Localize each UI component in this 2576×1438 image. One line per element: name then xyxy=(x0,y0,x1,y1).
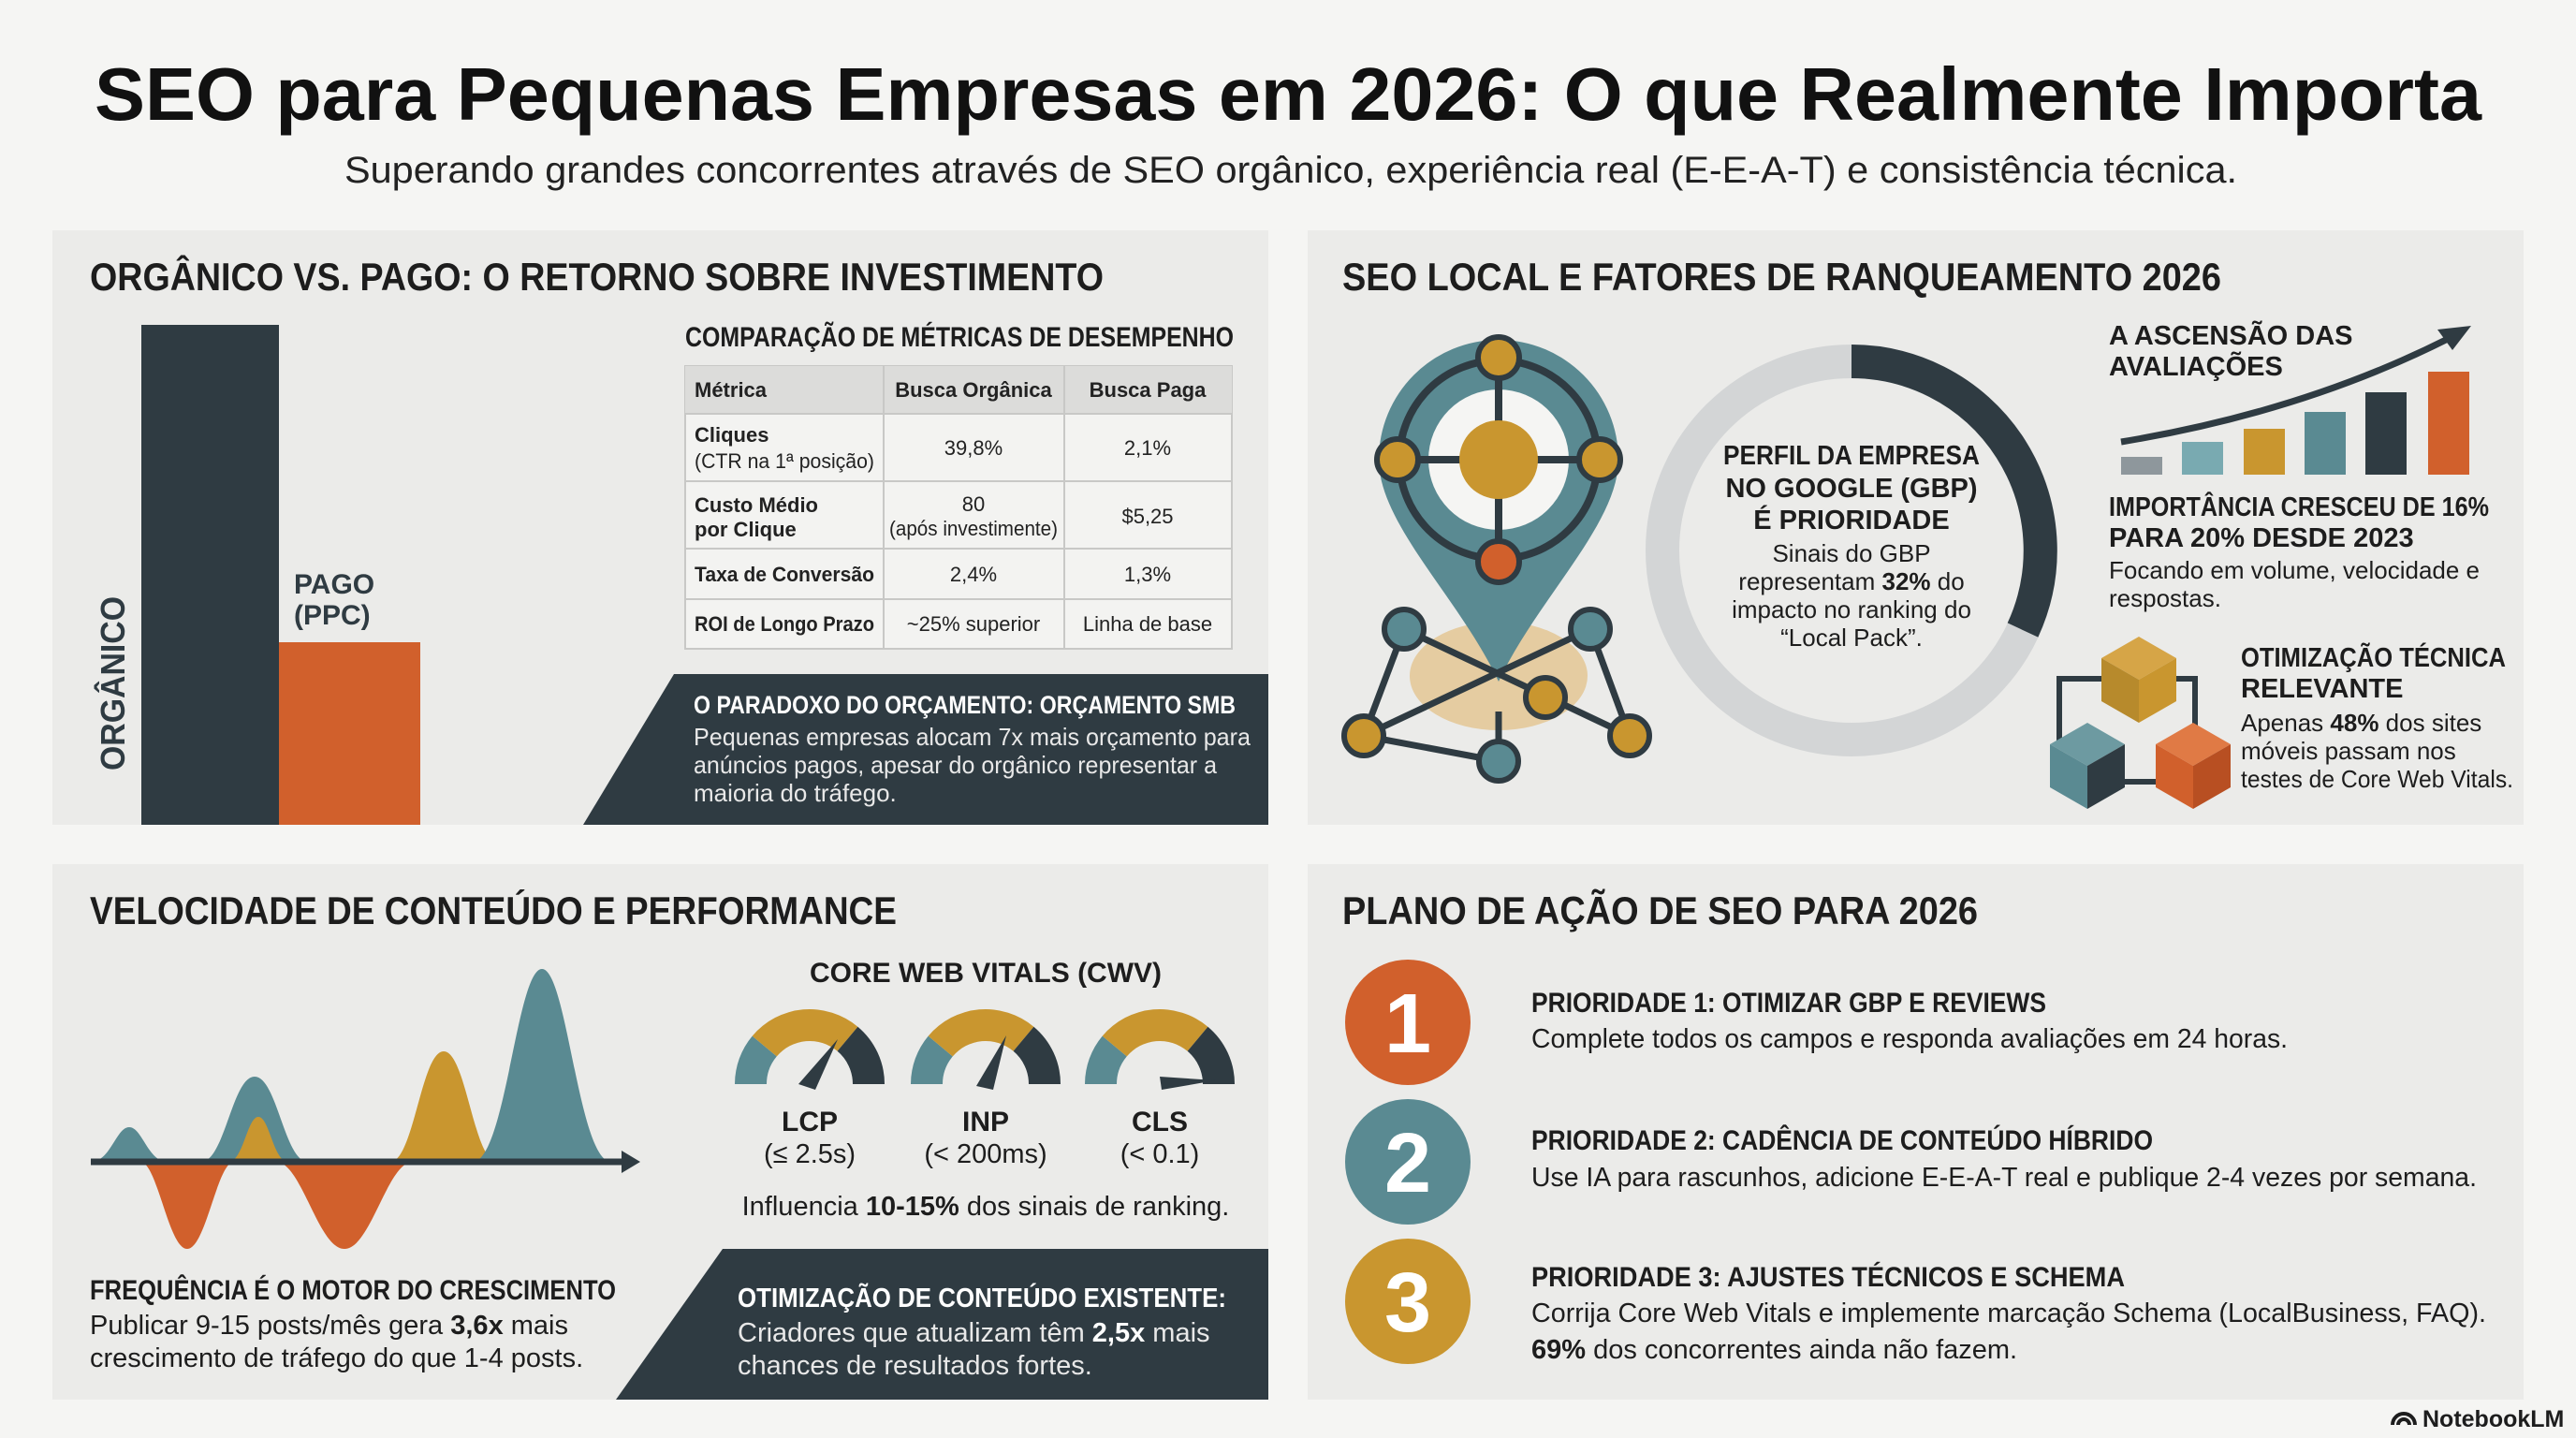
text: technical optimization: testes de Core Web Vitals. xyxy=(2241,765,2513,793)
chart: GBP donut: Sinais do GBP xyxy=(1772,539,1931,567)
table: metrics comparison: Busca Orgânica xyxy=(895,378,1053,402)
step 2: PRIORIDADE 2: CADÊNCIA DE CONTEÚDO HÍBRIDO xyxy=(1531,1124,2153,1156)
step 3 xyxy=(1345,1239,2486,1365)
table: metrics comparison: (após investimente) xyxy=(889,517,1058,540)
text: technical optimization: OTIMIZAÇÃO TÉCNICA xyxy=(2241,641,2506,673)
heading: organic vs paid: ORGÂNICO VS. PAGO: O RETORNO SOBRE INVESTIMENTO xyxy=(90,254,1104,299)
table: metrics comparison: 1,3% xyxy=(1124,563,1171,586)
subtitle: Superando grandes concorrentes através de SEO orgânico, experiência real (E-E-A-T) e consistência técnica. xyxy=(344,150,2237,191)
text: technical optimization: RELEVANTE xyxy=(2241,674,2403,704)
table: metrics comparison xyxy=(685,366,1232,649)
callout: budget paradox: Pequenas empresas alocam 7x mais orçamento para xyxy=(694,723,1251,751)
table: metrics comparison: 80 xyxy=(962,492,985,516)
chart: core web vitals gauges: INP xyxy=(962,1107,1009,1137)
chart: reviews rising bars xyxy=(2109,319,2471,475)
panel: action plan xyxy=(1308,864,2524,1400)
chart: core web vitals gauges xyxy=(735,958,1235,1222)
step 3: 69% dos concorrentes ainda não fazem. xyxy=(1531,1335,2017,1365)
callout: content optimization xyxy=(616,1249,1268,1400)
bar chart: organic vs paid: (PPC) xyxy=(294,600,371,631)
table: metrics comparison: Busca Paga xyxy=(1090,378,1207,402)
table: metrics comparison: Cliques xyxy=(695,423,768,447)
chart: core web vitals gauges: CORE WEB VITALS (CWV) xyxy=(810,958,1162,989)
chart: reviews rising bars: A ASCENSÃO DAS xyxy=(2109,319,2353,351)
table: metrics comparison: Custo Médio xyxy=(695,493,818,517)
callout: content optimization: chances de resultados fortes. xyxy=(738,1351,1092,1381)
callout: budget paradox: anúncios pagos, apesar do orgânico representar a xyxy=(694,751,1218,779)
table: metrics comparison: Métrica xyxy=(695,378,768,402)
step 1: Complete todos os campos e responda avaliações em 24 horas. xyxy=(1531,1024,2288,1054)
callout: content optimization: Criadores que atualizam têm 2,5x mais xyxy=(738,1318,1210,1348)
step 2: Use IA para rascunhos, adicione E-E-A-T real e publique 2-4 vezes por semana. xyxy=(1531,1163,2477,1193)
panel: local SEO xyxy=(1308,230,2524,825)
bar chart: organic vs paid: PAGO xyxy=(294,569,374,600)
chart: GBP donut: NO GOOGLE (GBP) xyxy=(1725,474,1978,504)
text: frequency: Publicar 9-15 posts/mês gera 3,6x mais xyxy=(90,1311,568,1341)
table: metrics comparison: Taxa de Conversão xyxy=(695,563,874,586)
panel: content velocity xyxy=(52,864,1268,1400)
table: metrics comparison: (CTR na 1ª posição) xyxy=(695,449,874,473)
callout: budget paradox: maioria do tráfego. xyxy=(694,779,897,807)
chart: reviews rising bars: AVALIAÇÕES xyxy=(2109,350,2283,382)
bar chart: organic vs paid: ORGÂNICO xyxy=(93,596,132,770)
table: metrics comparison: 2,1% xyxy=(1124,436,1171,460)
callout: content optimization: OTIMIZAÇÃO DE CONTEÚDO EXISTENTE: xyxy=(738,1282,1226,1313)
table: metrics comparison: ~25% superior xyxy=(907,612,1040,636)
text: frequency xyxy=(90,1274,616,1373)
step 1 xyxy=(1345,960,2288,1085)
chart: core web vitals gauges: (< 200ms) xyxy=(924,1139,1047,1169)
text: importance grew: IMPORTÂNCIA CRESCEU DE 16% xyxy=(2109,491,2489,522)
text: technical optimization: Apenas 48% dos sites xyxy=(2241,709,2481,737)
table: metrics comparison: por Clique xyxy=(695,518,797,541)
chart: core web vitals gauges: Influencia 10-15% dos sinais de ranking. xyxy=(742,1192,1229,1222)
chart: GBP donut: É PRIORIDADE xyxy=(1753,504,1950,536)
step 3: 3 xyxy=(1384,1256,1431,1350)
heading: content velocity: VELOCIDADE DE CONTEÚDO E PERFORMANCE xyxy=(90,888,897,932)
chart: GBP donut: impacto no ranking do xyxy=(1732,595,1971,624)
heading: action plan: PLANO DE AÇÃO DE SEO PARA 2026 xyxy=(1342,888,1978,932)
step 2 xyxy=(1345,1099,2477,1225)
icon: map pin network xyxy=(1344,337,1649,781)
chart: GBP donut xyxy=(1662,361,2041,740)
text: importance grew xyxy=(2109,491,2489,612)
text: frequency: FREQUÊNCIA É O MOTOR DO CRESCIMENTO xyxy=(90,1274,616,1306)
text: frequency: crescimento de tráfego do que 1-4 posts. xyxy=(90,1343,583,1373)
callout: budget paradox: O PARADOXO DO ORÇAMENTO: ORÇAMENTO SMB xyxy=(694,691,1236,719)
step 3: PRIORIDADE 3: AJUSTES TÉCNICOS E SCHEMA xyxy=(1531,1261,2125,1293)
icon: cubes xyxy=(2050,637,2231,809)
title: SEO para Pequenas Empresas em 2026: O que Realmente Importa xyxy=(95,52,2482,136)
panel: organic vs paid xyxy=(52,230,1268,825)
step 2: 2 xyxy=(1384,1117,1431,1211)
text: technical optimization: móveis passam nos xyxy=(2241,737,2456,765)
table: metrics comparison: Linha de base xyxy=(1083,612,1212,636)
logo: NotebookLM: NotebookLM xyxy=(2422,1406,2564,1432)
heading: local SEO: SEO LOCAL E FATORES DE RANQUEAMENTO 2026 xyxy=(1342,255,2221,299)
table: metrics comparison: $5,25 xyxy=(1121,505,1174,528)
text: importance grew: Focando em volume, velocidade e xyxy=(2109,556,2480,584)
chart: core web vitals gauges: LCP xyxy=(782,1107,838,1137)
chart: core web vitals gauges: CLS xyxy=(1132,1107,1188,1137)
callout: budget paradox xyxy=(583,674,1268,825)
chart: core web vitals gauges: (≤ 2.5s) xyxy=(764,1139,856,1169)
chart: GBP donut: PERFIL DA EMPRESA xyxy=(1723,441,1980,471)
table: metrics comparison: 2,4% xyxy=(950,563,997,586)
chart: GBP donut: representam 32% do xyxy=(1738,567,1965,595)
text: importance grew: PARA 20% DESDE 2023 xyxy=(2109,523,2414,553)
text: technical optimization xyxy=(2241,641,2513,793)
chart: core web vitals gauges: (< 0.1) xyxy=(1120,1139,1199,1169)
table: metrics comparison: 39,8% xyxy=(944,436,1003,460)
step 3: Corrija Core Web Vitals e implemente marcação Schema (LocalBusiness, FAQ). xyxy=(1531,1299,2486,1328)
step 1: 1 xyxy=(1384,977,1431,1071)
bar chart: organic vs paid xyxy=(93,325,420,825)
text: importance grew: respostas. xyxy=(2109,584,2221,612)
step 1: PRIORIDADE 1: OTIMIZAR GBP E REVIEWS xyxy=(1531,988,2046,1019)
chart: publishing waves xyxy=(91,969,640,1249)
chart: GBP donut: “Local Pack”. xyxy=(1780,624,1923,652)
table title: COMPARAÇÃO DE MÉTRICAS DE DESEMPENHO xyxy=(685,321,1234,353)
table: metrics comparison: ROI de Longo Prazo xyxy=(695,612,874,636)
